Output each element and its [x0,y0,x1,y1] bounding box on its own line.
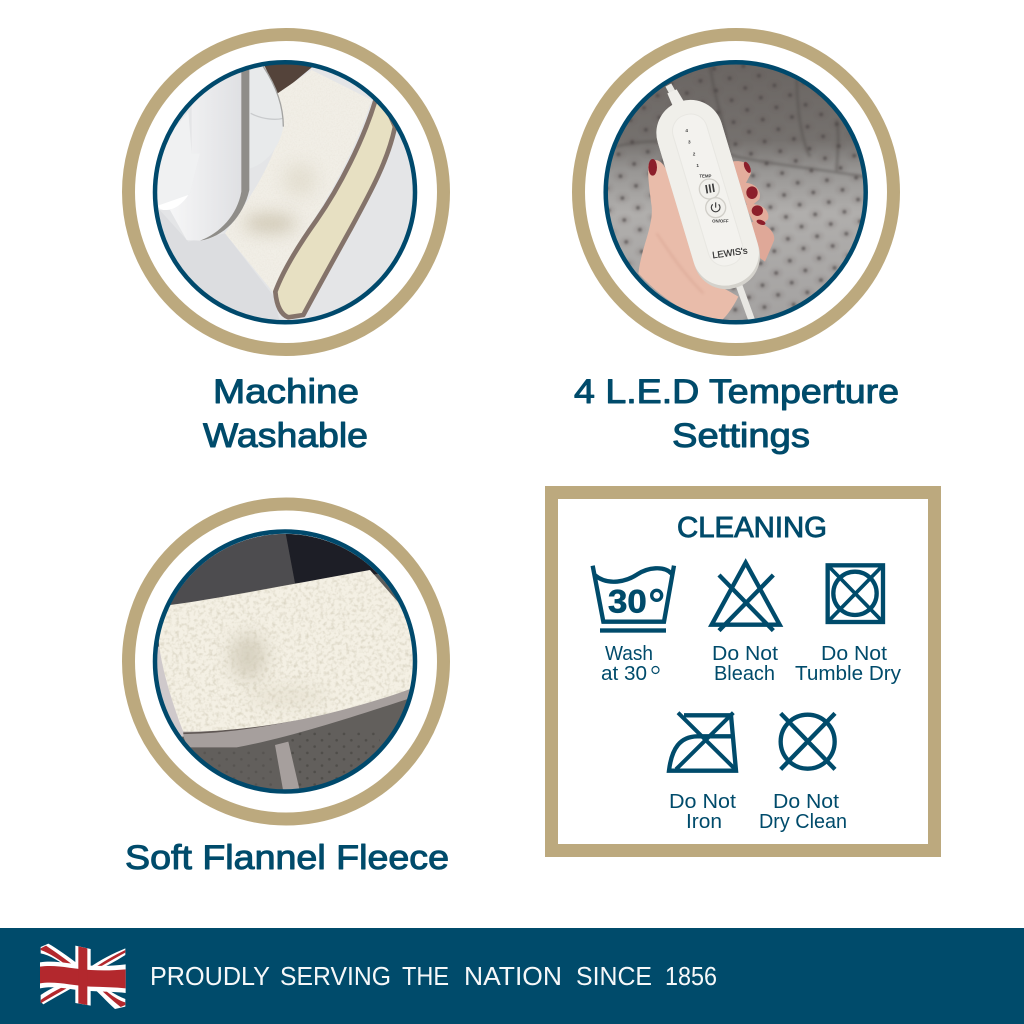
photo: steam iron on fleece [153,60,420,327]
panel: cleaning instructions [552,492,934,850]
cable [668,85,752,320]
icon: do not tumble dry [828,565,883,622]
tagline: SINCE [576,961,652,991]
photo: sherpa fleece close-up [153,530,420,797]
label: do not bleach: Bleach [714,663,775,685]
tagline: SERVING [280,961,391,991]
panel: machine washable [128,34,444,350]
label: do not tumble dry: Tumble Dry [795,663,901,685]
label: do not bleach: Do Not [712,643,778,665]
label: do not tumble dry [795,643,901,685]
tagline: PROUDLY [150,961,270,991]
controller markings: 4 [685,128,688,133]
label: do not dry clean: Dry Clean [759,811,847,833]
icon: do not iron [669,713,737,771]
gold ring: temperature settings [578,34,894,350]
tagline: NATION [464,961,562,991]
footer banner [0,928,1024,1024]
navy ring: temperature settings [606,62,866,322]
label: do not dry clean [759,791,847,833]
icon: wash at 30: 30 [608,583,647,620]
tagline [150,961,717,991]
heading: temperature settings: Settings [672,417,810,455]
label: do not tumble dry: Do Not [821,643,887,665]
panel border [552,492,934,850]
photo: hand holding controller [603,60,870,327]
heading: machine washable [203,373,368,455]
tagline: THE [402,961,449,991]
panel: temperature settings [578,34,894,350]
label: do not iron: Iron [686,811,722,833]
controller markings: ON/OFF [712,219,729,224]
icon: do not bleach [712,563,780,631]
controller markings: TEMP [699,174,711,179]
label: wash at 30: at 30 [601,663,647,685]
controller buttons [699,179,726,218]
icon: do not dry clean [781,713,835,769]
panel: soft flannel fleece [128,504,444,819]
heading: machine washable: Washable [203,417,368,455]
heading: temperature settings [574,373,899,455]
controller markings: LEWIS's [712,246,749,260]
heading: cleaning: CLEANING [677,512,827,544]
label: do not bleach [712,643,778,685]
controller markings [685,128,749,260]
navy ring: soft flannel fleece [155,532,415,792]
fingers [732,161,774,262]
label: wash at 30: Wash [605,643,653,665]
label: do not iron: Do Not [669,791,736,813]
controller markings: 3 [688,140,691,145]
icon: union jack flag [40,944,126,1009]
tagline: 1856 [665,961,717,991]
label: wash at 30 [601,643,659,685]
label: do not iron [669,791,736,833]
controller body [656,100,760,290]
palm [638,160,738,322]
heading: soft flannel fleece: Soft Flannel Fleece [125,839,449,877]
label: do not dry clean: Do Not [773,791,839,813]
gold ring: soft flannel fleece [128,504,444,819]
iron [170,97,215,240]
controller markings: 1 [696,163,699,168]
gold ring: machine washable [128,34,444,350]
icon: wash at 30 [593,566,674,633]
controller markings: 2 [693,151,696,156]
heading: machine washable: Machine [213,373,359,411]
navy ring: machine washable [155,62,415,322]
heading: temperature settings: 4 L.E.D Temperture [574,373,899,411]
banner background [0,928,1024,1024]
cream reverse with brown trim [275,100,395,317]
